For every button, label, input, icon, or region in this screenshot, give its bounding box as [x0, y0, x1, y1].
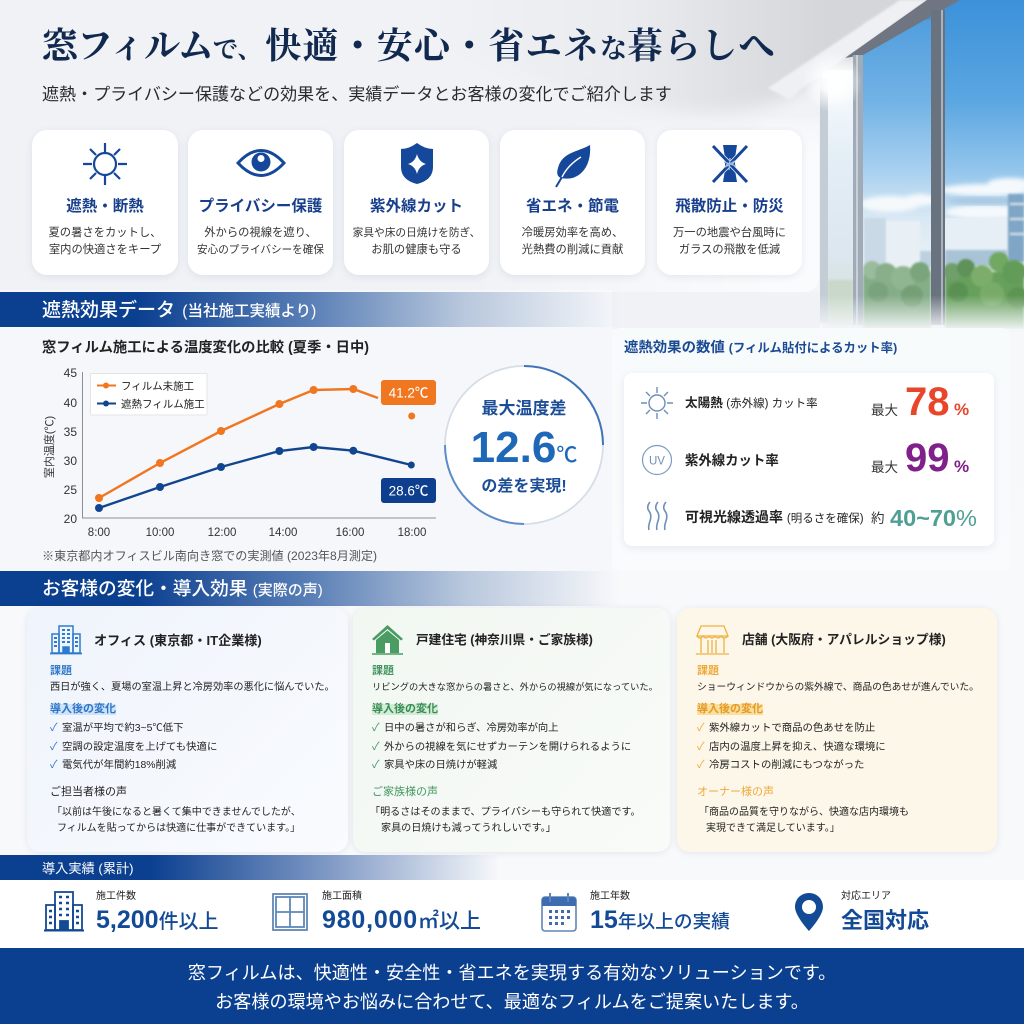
section bar: heat data	[0, 292, 620, 327]
list item: ✓	[697, 722, 705, 734]
row value: 78%: %	[954, 400, 969, 419]
icon: calendar	[541, 892, 577, 932]
feature card: UV	[344, 130, 489, 275]
list item: ✓	[50, 759, 58, 771]
card heading: 飛散防止・防災	[675, 198, 784, 215]
customer card: house	[353, 608, 670, 852]
stat value: 全国対応	[841, 908, 929, 933]
line chart: temperature: 12:00	[208, 527, 236, 539]
line chart: temperature: 41.2℃	[389, 386, 429, 400]
row value: 99%	[871, 436, 969, 480]
line chart: temperature: 35	[64, 425, 77, 439]
list item: ✓	[697, 741, 705, 753]
card text: 冷暖房効率を高め、	[522, 227, 623, 239]
feature card: safety	[657, 130, 802, 275]
list item: 室温が平均で約3~5℃低下	[62, 723, 184, 734]
stats strip background	[0, 880, 1024, 948]
issue text: 西日が強く、夏場の室温上昇と冷房効率の悪化に悩んでいた。	[50, 682, 335, 693]
icon: shield	[401, 143, 433, 184]
row value: 99%: %	[954, 457, 969, 476]
card text: ガラスの飛散を低減	[679, 244, 780, 256]
feature card: privacy	[188, 130, 333, 275]
section heading: 遮熱効果データ (当社施工実績より)	[42, 300, 316, 321]
stat label: 施工面積	[322, 891, 362, 902]
feature card: energy	[500, 130, 645, 275]
stat: area	[272, 890, 481, 934]
card text: 安心のプライバシーを確保	[197, 244, 324, 256]
row value: 99%: 最大	[871, 460, 898, 475]
card heading: 遮熱・断熱	[66, 198, 144, 215]
list item: ✓	[50, 722, 58, 734]
list item: ✓	[372, 759, 380, 771]
icon: building	[44, 891, 84, 932]
callout label: 最大温度差	[482, 399, 566, 418]
icon: office building	[50, 625, 82, 654]
icon: eye	[236, 149, 286, 177]
issue text: ショーウィンドウからの紫外線で、商品の色あせが進んでいた。	[697, 682, 979, 693]
label: issue: 課題	[372, 665, 394, 677]
row label: solar heat: 太陽熱 (赤外線) カット率	[685, 396, 818, 410]
row label: UV: 紫外線カット率	[685, 453, 779, 468]
icon: house	[372, 625, 403, 655]
stat label: 施工年数	[590, 891, 630, 902]
line chart: temperature: 25	[64, 483, 77, 497]
icon: heat waves	[646, 502, 668, 530]
stat value: 980,000㎡以上	[322, 906, 481, 934]
line chart: temperature: 28.6℃	[389, 484, 429, 498]
card text: 万一の地震や台風時に	[673, 227, 786, 239]
list item: ✓	[697, 759, 705, 771]
label: after: 導入後の変化	[372, 703, 438, 715]
panel heading: 遮熱効果の数値 (フィルム貼付によるカット率)	[624, 340, 897, 356]
list item: 紫外線カットで商品の色あせを防止	[709, 723, 875, 734]
quote line: 「以前は午後になると暑くて集中できませんでしたが、	[52, 807, 301, 818]
issue text: リビングの大きな窓からの暑さと、外からの視線が気になっていた。	[372, 682, 658, 692]
row value: 78%: 78	[905, 380, 950, 424]
line chart: temperature: 20	[64, 512, 77, 526]
list item: 空調の設定温度を上げても快適に	[62, 742, 217, 753]
label: issue: 課題	[50, 665, 72, 677]
card title: 店舗 (大阪府・アパレルショップ様)	[742, 632, 946, 647]
card title: 戸建住宅 (神奈川県・ご家族様)	[416, 633, 593, 647]
customer card: office	[27, 608, 348, 852]
footer line: 窓フィルムは、快適性・安全性・省エネを実現する有効なソリューションです。	[188, 963, 836, 983]
icon: UV circle: UV	[649, 456, 665, 468]
line chart: temperature: 遮熱フィルム施工	[121, 398, 205, 410]
stat value: 15年以上の実績	[590, 906, 730, 934]
section heading: 導入実績 (累計)	[42, 861, 134, 876]
list item: ✓	[372, 722, 380, 734]
line chart: temperature: 18:00	[398, 527, 426, 539]
panel: heat values	[612, 328, 1010, 570]
card text: お肌の健康も守る	[371, 244, 462, 256]
section heading: お客様の変化・導入効果 (実際の声)	[42, 578, 323, 599]
line chart: temperature	[42, 366, 436, 539]
list item: 外からの視線を気にせずカーテンを開けられるように	[384, 742, 631, 753]
callout value: 12.6℃	[471, 423, 577, 472]
list item: 家具や床の日焼けが軽減	[384, 760, 497, 771]
line chart: temperature: 8:00	[88, 527, 110, 539]
icon: window	[272, 893, 308, 931]
row value: 40-70%: 40~70%	[890, 505, 977, 531]
stat: area served	[793, 885, 943, 940]
stat label: 施工件数	[96, 891, 136, 902]
list item: 冷房コストの削減にもつながった	[709, 760, 864, 771]
card title: オフィス (東京都・IT企業様)	[94, 633, 262, 648]
row value: 40-70%: 約	[871, 511, 884, 526]
customer card: store	[677, 608, 997, 852]
card text: 室内の快適さをキープ	[49, 244, 161, 256]
line chart: temperature: 10:00	[146, 527, 174, 539]
list item: 店内の温度上昇を抑え、快適な環境に	[709, 742, 886, 753]
stat: works	[44, 890, 219, 934]
footnote: ※東京都内オフィスビル南向き窓での実測値 (2023年8月測定)	[42, 549, 377, 563]
list item: 電気代が年間約18%削減	[62, 760, 176, 771]
label: voice: オーナー様の声	[697, 786, 774, 798]
label: after: 導入後の変化	[697, 703, 763, 715]
footer banner	[0, 948, 1024, 1024]
translucent panel behind feature cards	[720, 276, 760, 292]
list item: ✓	[50, 741, 58, 753]
quote line: フィルムを貼ってからは快適に仕事ができています。」	[57, 823, 300, 834]
card text: 光熱費の削減に貢献	[522, 244, 623, 256]
card text: 外からの視線を遮り、	[204, 227, 317, 239]
icon: map pin	[794, 892, 824, 932]
stat label: 対応エリア	[841, 891, 891, 902]
stat value: 5,200件以上	[96, 906, 219, 934]
line chart: temperature: フィルム未施工	[121, 380, 194, 392]
card heading: 省エネ・節電	[526, 198, 619, 215]
list item: ✓	[372, 741, 380, 753]
row value: 78%: 最大	[871, 403, 898, 418]
icon: shop	[696, 625, 729, 655]
values card	[624, 373, 994, 546]
callout note: の差を実現!	[481, 478, 567, 495]
icon: UV circle	[642, 444, 672, 476]
icon: leaf	[555, 145, 590, 188]
callout ring	[444, 365, 604, 525]
line chart: temperature: 16:00	[336, 527, 364, 539]
label: after: 導入後の変化	[50, 703, 116, 715]
row label: visible light: 可視光線透過率 (明るさを確保)	[685, 509, 864, 525]
icon: sun	[83, 143, 127, 185]
label: voice: ご担当者様の声	[50, 786, 127, 798]
callout: max temperature difference	[444, 365, 604, 525]
card text: 家具や床の日焼けを防ぎ、	[353, 227, 480, 239]
footer line: お客様の環境やお悩みに合わせて、最適なフィルムをご提案いたします。	[215, 992, 809, 1012]
line chart: temperature: 45	[64, 366, 77, 380]
label: voice: ご家族様の声	[372, 786, 438, 798]
card heading: 紫外線カット	[370, 198, 463, 215]
icon: sun outline	[641, 387, 673, 419]
title: 窓フィルムで、快適・安心・省エネな暮らしへ	[42, 26, 776, 66]
chart title: 窓フィルム施工による温度変化の比較 (夏季・日中)	[42, 340, 369, 356]
quote line: 家具の日焼けも減ってうれしいです。」	[381, 823, 556, 834]
quote line: 実現できて満足しています。」	[706, 823, 840, 834]
section bar: track record	[0, 855, 500, 880]
line chart: temperature: 室内温度(℃)	[42, 416, 56, 478]
list item: 日中の暑さが和らぎ、冷房効率が向上	[384, 723, 559, 734]
quote line: 「明るさはそのままで、プライバシーも守られて快適です。	[370, 807, 641, 818]
subtitle: 遮熱・プライバシー保護などの効果を、実績データとお客様の変化でご紹介します	[42, 85, 672, 104]
row value: 99%: 99	[905, 436, 950, 480]
stat: years	[541, 890, 730, 934]
icon: shattered glass crossed	[712, 145, 748, 183]
card text: 夏の暑さをカットし、	[48, 227, 161, 239]
row value: 78%	[871, 380, 969, 424]
quote line: 「商品の品質を守りながら、快適な店内環境も	[699, 807, 909, 818]
line chart: temperature: 40	[64, 396, 77, 410]
label: issue: 課題	[697, 665, 719, 677]
section bar: customers	[0, 571, 620, 606]
card heading: プライバシー保護	[199, 198, 322, 215]
line chart: temperature: 14:00	[269, 527, 297, 539]
line chart: temperature: 30	[64, 454, 77, 468]
feature card: heat	[32, 130, 178, 275]
